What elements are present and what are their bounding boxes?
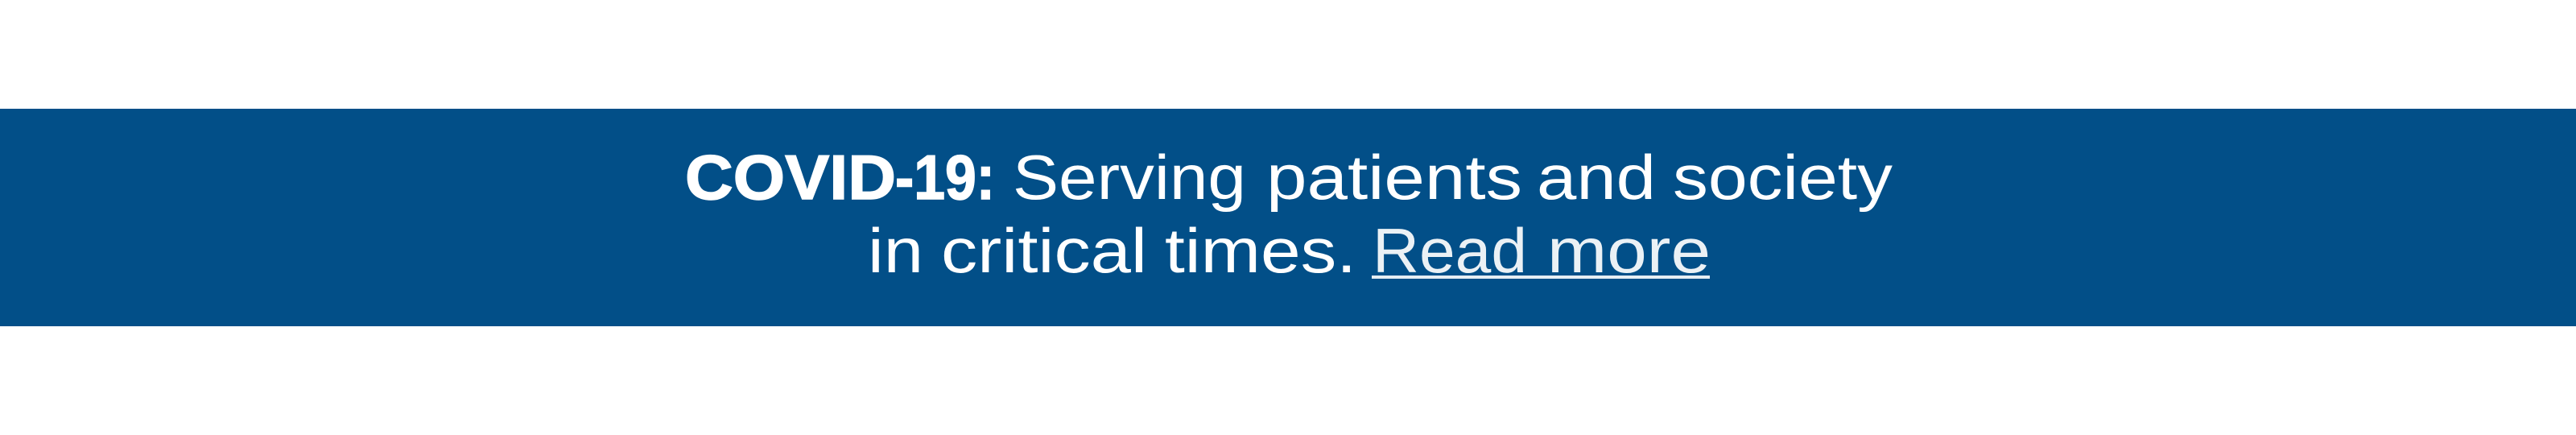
link: read more: more	[1547, 215, 1711, 286]
bold label: COVID-19: -19:	[895, 142, 995, 213]
headline text: and	[1537, 142, 1656, 213]
headline continuation: in	[868, 215, 923, 286]
panel: blue band	[0, 109, 2576, 326]
heading: line one	[685, 142, 1893, 213]
headline continuation: times.	[1165, 215, 1356, 286]
headline text: society	[1673, 142, 1893, 213]
heading: line two	[868, 215, 1711, 286]
headline continuation: critical	[941, 215, 1147, 286]
link: read more: Read	[1373, 215, 1527, 286]
headline text: patients	[1266, 142, 1522, 213]
bold label: COVID-19: COVID	[685, 142, 896, 213]
headline text	[1013, 142, 1893, 213]
headline text: Serving	[1013, 142, 1246, 213]
headline continuation	[868, 215, 1356, 286]
bold label: COVID-19	[685, 142, 995, 213]
link: read more	[1372, 215, 1711, 286]
